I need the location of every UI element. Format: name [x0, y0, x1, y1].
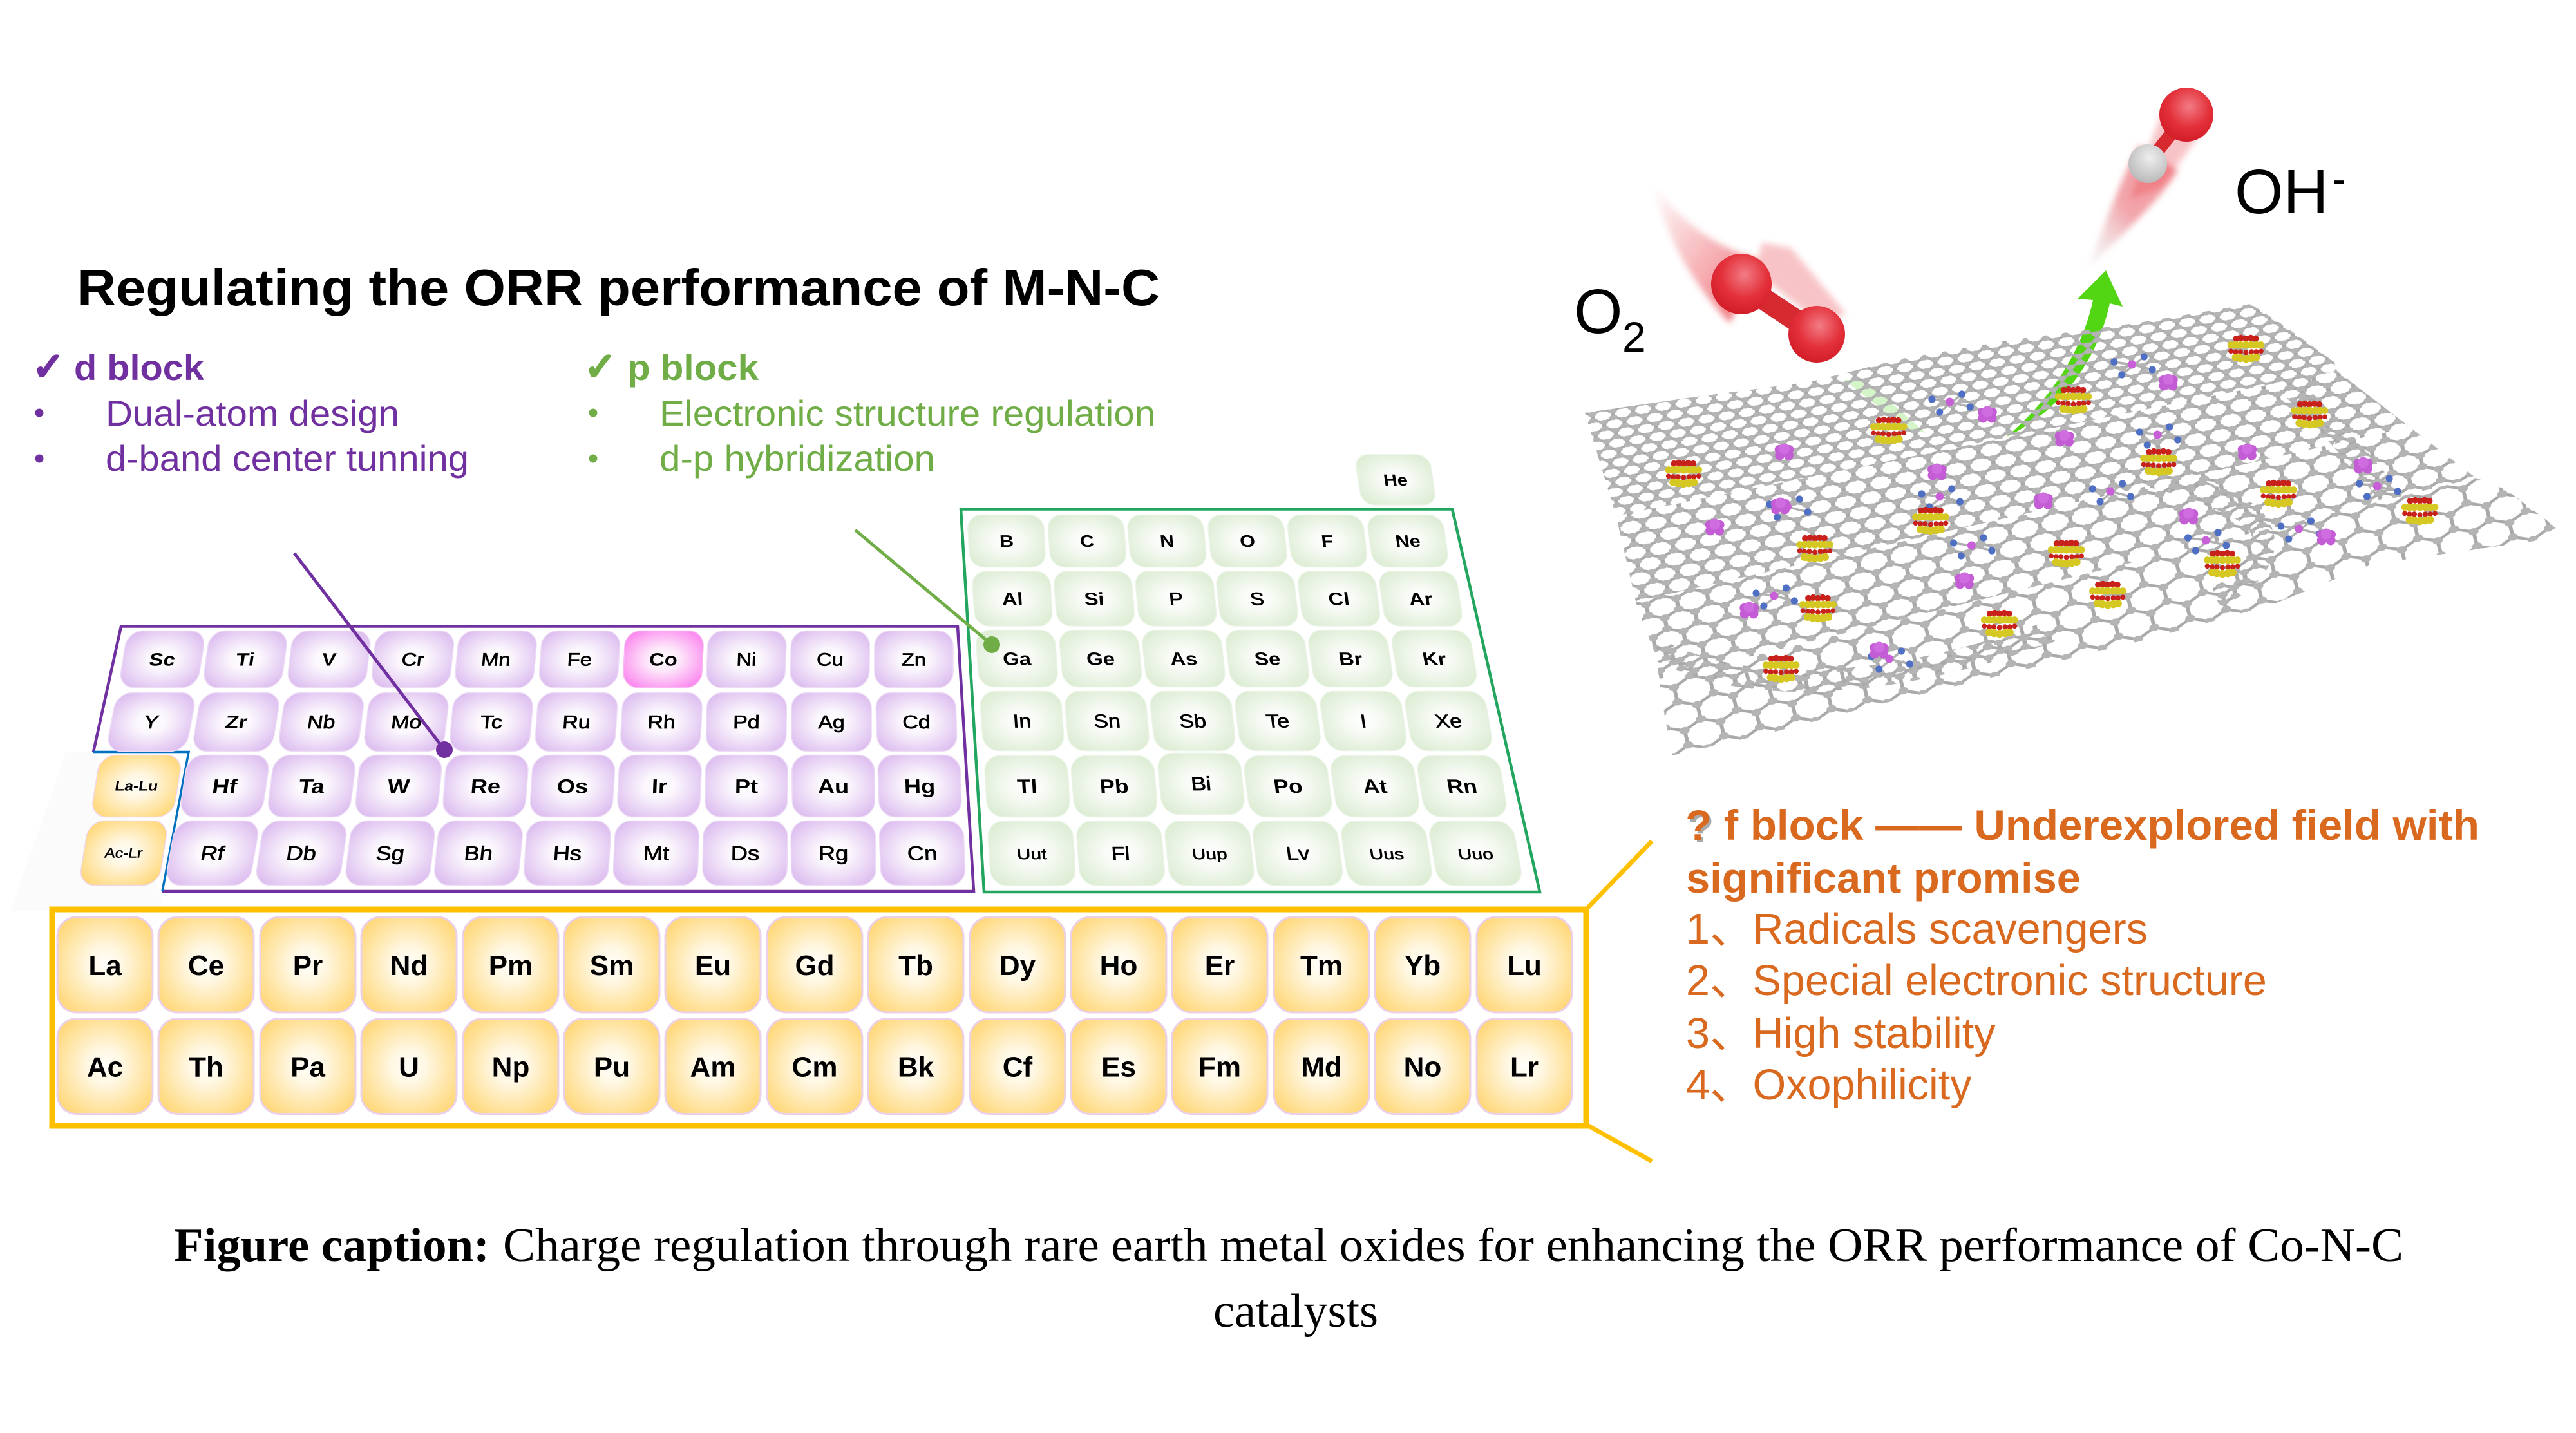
Tb — [868, 917, 963, 1012]
Nb: Nb — [306, 711, 337, 732]
Dy — [970, 917, 1065, 1012]
Db: Db — [285, 842, 318, 865]
Kr — [1390, 630, 1479, 687]
Pr — [260, 917, 355, 1012]
p block frame — [961, 509, 1540, 892]
Th: Th — [189, 1051, 223, 1083]
Uuo: Uuo — [1456, 846, 1495, 862]
La: La — [88, 950, 122, 982]
Rg: Rg — [819, 842, 848, 865]
Db — [254, 821, 348, 885]
placeholder cell Ac-Lr — [79, 821, 169, 885]
Pa — [260, 1019, 355, 1114]
Yb — [1375, 917, 1470, 1012]
Zn: Zn — [902, 650, 926, 670]
Pd: Pd — [733, 711, 760, 732]
Pm — [463, 917, 558, 1012]
O: O — [1239, 532, 1256, 551]
Os — [529, 755, 616, 817]
Au — [792, 755, 875, 817]
P: P — [1168, 589, 1184, 609]
Ni — [706, 631, 787, 688]
d block row 4 — [165, 821, 966, 885]
Hs — [523, 821, 612, 885]
f block list item 1: 1、Radicals scavengers — [1686, 906, 2148, 953]
V: V — [321, 650, 337, 670]
Os: Os — [556, 775, 589, 798]
placeholder cell La-Lu — [90, 755, 183, 817]
Nd: Nd — [390, 950, 428, 982]
Pm: Pm — [489, 950, 533, 982]
placeholder cell La-Lu: La-Lu — [114, 778, 159, 793]
Uup — [1163, 821, 1256, 886]
Cd — [876, 693, 957, 751]
Hg: Hg — [904, 775, 936, 798]
Nd — [361, 917, 457, 1012]
Se: Se — [1253, 649, 1282, 669]
Lu: Lu — [1507, 950, 1542, 982]
Tl: Tl — [1016, 775, 1038, 797]
figure caption — [174, 1219, 2403, 1338]
nitrogen-coordinated metal sites — [1752, 353, 2401, 673]
Co highlighted: Co — [649, 650, 678, 670]
F: F — [1320, 532, 1334, 551]
title: Regulating the ORR performance of M-N-C — [77, 259, 1160, 316]
green arrow — [2007, 270, 2123, 437]
label: OH-: OH — [2235, 157, 2329, 227]
Gd — [767, 917, 862, 1012]
Sb — [1149, 692, 1236, 751]
Mt: Mt — [643, 842, 670, 865]
Ho: Ho — [1100, 950, 1137, 982]
pale green trace — [1844, 380, 1926, 433]
panel: f block text — [1685, 801, 2479, 1109]
figure caption: Charge regulation through rare earth metal oxides for enhancing the ORR performance of Co-N-C — [503, 1219, 2403, 1272]
Uuo — [1427, 821, 1524, 886]
Co highlighted — [623, 631, 704, 688]
f block row 1 — [57, 917, 1572, 1012]
Pr: Pr — [293, 950, 323, 982]
Xe: Xe — [1433, 710, 1464, 732]
Ds — [703, 821, 788, 885]
Sm: Sm — [590, 950, 634, 982]
Bh — [433, 821, 524, 885]
Fm: Fm — [1198, 1051, 1241, 1083]
p block row 1 — [967, 515, 1450, 567]
Re: Re — [469, 775, 501, 798]
Cu — [790, 631, 870, 688]
Mo — [363, 693, 450, 751]
f block list item 4: 4、Oxophilicity — [1686, 1061, 1972, 1109]
Mn — [454, 631, 538, 688]
Cr — [370, 631, 455, 688]
Fe: Fe — [567, 650, 592, 670]
Tl — [984, 756, 1070, 817]
rare earth oxide clusters — [1665, 335, 2438, 683]
No — [1375, 1019, 1470, 1114]
Eu — [665, 917, 761, 1012]
p block row 2 — [972, 571, 1464, 626]
d block frame — [93, 626, 974, 891]
f block heading: significant promise — [1686, 854, 2081, 902]
Ta: Ta — [298, 775, 327, 798]
Cl — [1296, 571, 1381, 626]
Ar: Ar — [1408, 589, 1434, 609]
Eu: Eu — [695, 950, 731, 982]
Kr: Kr — [1421, 649, 1448, 669]
p block helium cell: He — [1382, 471, 1409, 489]
Lv — [1251, 821, 1345, 886]
Ta — [267, 755, 357, 817]
Hf: Hf — [211, 775, 239, 798]
Ac: Ac — [87, 1051, 123, 1083]
Er: Er — [1205, 950, 1235, 982]
Ir — [617, 755, 702, 817]
Tc — [449, 693, 534, 751]
Bi: Bi — [1190, 772, 1212, 794]
O2 molecule — [1654, 184, 1846, 363]
panel: d block text — [32, 345, 469, 479]
Lv: Lv — [1285, 842, 1311, 864]
Re — [442, 755, 529, 817]
p block helium cell — [1354, 455, 1437, 505]
Sg — [344, 821, 437, 885]
p block heading — [584, 345, 759, 390]
Bk — [868, 1019, 963, 1114]
p block heading: ✓ — [584, 345, 616, 390]
B — [967, 515, 1046, 567]
Ho — [1071, 917, 1166, 1012]
Pu — [564, 1019, 659, 1114]
d block row 1 — [118, 631, 953, 688]
At — [1329, 756, 1421, 817]
faint ghost background behind lanthanide cells — [11, 752, 161, 911]
d block heading: ✓ — [32, 345, 64, 390]
As: As — [1169, 649, 1198, 669]
Uus — [1340, 821, 1434, 886]
Sb: Sb — [1178, 710, 1208, 732]
O — [1207, 515, 1288, 567]
Bi — [1157, 754, 1245, 814]
Cl: Cl — [1327, 589, 1351, 609]
Cu: Cu — [817, 650, 844, 670]
U: U — [399, 1051, 419, 1083]
f block list item 2: 2、Special electronic structure — [1686, 957, 2267, 1005]
Rh — [620, 693, 703, 751]
Tc: Tc — [480, 711, 503, 732]
Ti — [202, 631, 289, 688]
p block row 4 — [980, 692, 1494, 751]
label: O2 — [1574, 276, 1646, 361]
As — [1141, 630, 1226, 687]
panel: p block text — [584, 345, 1155, 479]
Th — [158, 1019, 254, 1114]
label: O2: 2 — [1622, 313, 1646, 361]
Uut: Uut — [1016, 846, 1048, 862]
Mn: Mn — [480, 650, 511, 670]
Rn: Rn — [1445, 775, 1479, 797]
Lr: Lr — [1510, 1051, 1539, 1083]
In: In — [1012, 710, 1032, 732]
Mt — [613, 821, 699, 885]
Np — [463, 1019, 558, 1114]
Hg — [878, 755, 961, 817]
p block row 6 — [987, 821, 1524, 886]
OH molecule — [2088, 88, 2213, 269]
La — [57, 917, 153, 1012]
Ag: Ag — [818, 711, 845, 732]
Se — [1224, 630, 1311, 687]
figure caption: Figure caption: — [174, 1219, 489, 1272]
Ru: Ru — [562, 711, 591, 732]
d block bullet: d-band center tunning: d-band center tunning — [106, 438, 469, 479]
Fe — [538, 631, 621, 688]
Ce — [158, 917, 254, 1012]
Cf — [970, 1019, 1065, 1114]
Te: Te — [1265, 710, 1291, 732]
Tm — [1274, 917, 1369, 1012]
Ni: Ni — [736, 650, 757, 670]
Lr — [1477, 1019, 1572, 1114]
Rf — [165, 821, 260, 885]
Ce: Ce — [188, 950, 224, 982]
Dy: Dy — [999, 950, 1036, 982]
Rf: Rf — [199, 842, 227, 865]
Te — [1233, 692, 1322, 751]
Xe — [1403, 692, 1494, 751]
p block heading: p block — [627, 347, 759, 388]
I: I — [1359, 710, 1368, 732]
Pa: Pa — [290, 1051, 325, 1083]
Al — [972, 571, 1053, 626]
Mo: Mo — [390, 711, 423, 732]
V — [287, 631, 372, 688]
panel: f block frame and flare lines — [52, 841, 1652, 1161]
Md — [1274, 1019, 1369, 1114]
Cf: Cf — [1003, 1051, 1033, 1083]
Lu — [1477, 917, 1572, 1012]
B: B — [999, 531, 1014, 551]
Cm: Cm — [792, 1051, 837, 1083]
figure caption: catalysts — [1213, 1285, 1378, 1338]
Cn — [878, 821, 966, 885]
No: No — [1404, 1051, 1441, 1083]
Ar — [1378, 571, 1464, 626]
Fm — [1172, 1019, 1267, 1114]
Np: Np — [492, 1051, 529, 1083]
Fl — [1075, 821, 1166, 886]
Es — [1071, 1019, 1166, 1114]
Cn: Cn — [907, 842, 938, 865]
Ti: Ti — [234, 650, 256, 670]
Rn — [1415, 756, 1509, 817]
Cd: Cd — [902, 711, 931, 732]
Ds: Ds — [731, 842, 759, 865]
Hs: Hs — [553, 842, 582, 865]
Rg — [791, 821, 876, 885]
pointer: d block — [294, 553, 453, 758]
Sn: Sn — [1093, 710, 1121, 732]
N: N — [1159, 532, 1175, 551]
Am: Am — [690, 1051, 735, 1083]
Hf — [179, 755, 270, 817]
Zr — [191, 693, 281, 751]
In — [980, 692, 1065, 751]
Uup: Uup — [1191, 846, 1228, 862]
Sm — [564, 917, 659, 1012]
W — [354, 755, 443, 817]
Zn — [875, 631, 953, 688]
d block heading: d block — [74, 347, 205, 388]
Cm — [767, 1019, 862, 1114]
S — [1215, 571, 1299, 626]
Uut — [987, 821, 1076, 886]
Y — [106, 693, 197, 751]
Es: Es — [1101, 1051, 1136, 1083]
U — [361, 1019, 457, 1114]
Cr: Cr — [401, 650, 425, 670]
Ag — [791, 693, 871, 751]
pointer: p block — [855, 530, 1000, 653]
Ne — [1366, 515, 1450, 567]
At: At — [1361, 775, 1388, 797]
Md: Md — [1301, 1051, 1342, 1083]
Sg: Sg — [375, 842, 406, 865]
placeholder cell Ac-Lr: Ac-Lr — [104, 845, 144, 860]
F — [1286, 515, 1368, 567]
Gd: Gd — [795, 950, 835, 982]
Pb — [1070, 756, 1158, 817]
f block list item 3: 3、High stability — [1686, 1010, 1996, 1058]
Pu: Pu — [594, 1051, 630, 1083]
cobalt clusters — [1705, 374, 2372, 658]
Ru — [535, 693, 618, 751]
Po: Po — [1272, 775, 1304, 797]
p block bullet: electronic structure regulation: Electronic structure regulation — [659, 393, 1155, 433]
Si — [1053, 571, 1135, 626]
Am — [665, 1019, 761, 1114]
Ga — [975, 630, 1059, 687]
Zr: Zr — [223, 712, 249, 732]
label: O2: O — [1574, 276, 1622, 346]
d block row 3 — [179, 755, 961, 817]
Ga: Ga — [1002, 649, 1032, 669]
Pb: Pb — [1099, 775, 1130, 797]
p block row 5 — [984, 754, 1509, 817]
Rh: Rh — [647, 711, 676, 732]
Pt: Pt — [735, 775, 758, 798]
S: S — [1249, 589, 1265, 609]
Er — [1172, 917, 1267, 1012]
Ge: Ge — [1086, 649, 1115, 669]
Pd — [706, 693, 787, 751]
N — [1126, 515, 1208, 567]
Al: Al — [1001, 589, 1023, 609]
Si: Si — [1083, 589, 1105, 609]
Bk: Bk — [898, 1051, 934, 1083]
Yb: Yb — [1405, 950, 1441, 982]
Y: Y — [142, 712, 160, 732]
f block heading: ? — [1688, 804, 1714, 851]
Sn — [1064, 692, 1150, 751]
Ge — [1059, 630, 1142, 687]
Nb — [278, 693, 365, 751]
Fl: Fl — [1111, 842, 1130, 864]
Ac — [57, 1019, 153, 1114]
Au: Au — [818, 775, 849, 798]
I — [1318, 692, 1408, 751]
f block row 2 — [57, 1019, 1572, 1114]
Uus: Uus — [1368, 846, 1405, 862]
p block row 3 — [975, 630, 1479, 687]
W: W — [386, 775, 411, 798]
p block bullet: d-p hybridization: d-p hybridization — [659, 438, 935, 479]
d block heading — [32, 345, 205, 390]
Br — [1307, 630, 1394, 687]
d block row 2 — [106, 693, 957, 751]
Tb: Tb — [898, 950, 933, 982]
Sc: Sc — [147, 650, 176, 670]
label: OH-: - — [2333, 157, 2346, 202]
f block heading: ? f block —— Underexplored field with — [1685, 801, 2479, 849]
P — [1134, 571, 1218, 626]
f block heading — [1685, 801, 2479, 902]
Pt — [705, 755, 788, 817]
Bh: Bh — [463, 842, 494, 865]
C — [1047, 515, 1127, 567]
Ne: Ne — [1394, 532, 1422, 551]
Ir: Ir — [651, 775, 668, 798]
C: C — [1079, 532, 1095, 551]
d block bullet: dual-atom design: Dual-atom design — [106, 393, 399, 433]
Po — [1242, 756, 1334, 817]
graphene sheet — [1585, 304, 2556, 755]
Sc — [118, 631, 206, 688]
Tm: Tm — [1300, 950, 1343, 982]
Br: Br — [1338, 649, 1364, 669]
